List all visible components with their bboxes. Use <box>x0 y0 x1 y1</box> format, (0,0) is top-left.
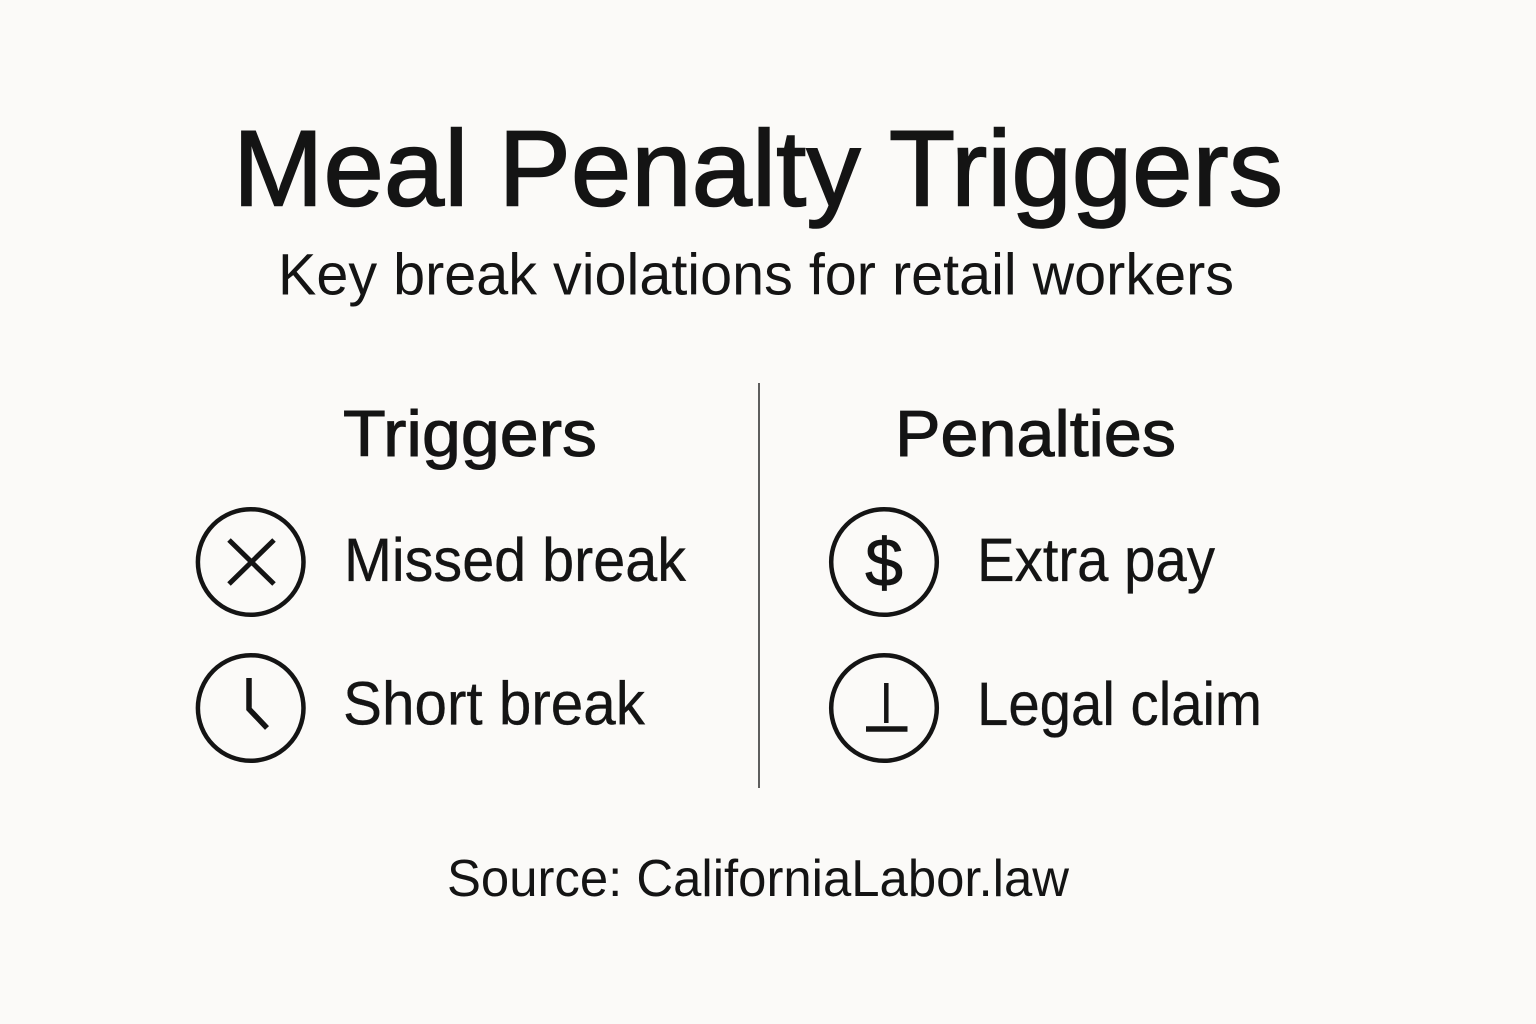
heading: Penalties: Penalties <box>895 397 1176 470</box>
icon: extra pay dollar: $ <box>865 525 903 601</box>
label: extra pay: Extra pay <box>977 526 1215 594</box>
icon: short break clock <box>198 655 304 761</box>
subtitle: Key break violations for retail workers <box>278 242 1234 308</box>
source note: Source: CaliforniaLabor.law <box>447 850 1069 908</box>
panel: triggers <box>198 397 686 761</box>
panel: penalties <box>831 397 1262 761</box>
heading: Triggers: Triggers <box>343 397 597 470</box>
icon: extra pay dollar <box>831 509 937 615</box>
icon: legal claim <box>831 655 937 761</box>
icon: missed break cross <box>198 509 304 615</box>
label: legal claim: Legal claim <box>977 670 1262 738</box>
title: Meal Penalty Triggers <box>233 108 1283 228</box>
label: missed break: Missed break <box>344 526 686 594</box>
column divider <box>758 383 760 788</box>
label: short break: Short break <box>343 670 645 738</box>
